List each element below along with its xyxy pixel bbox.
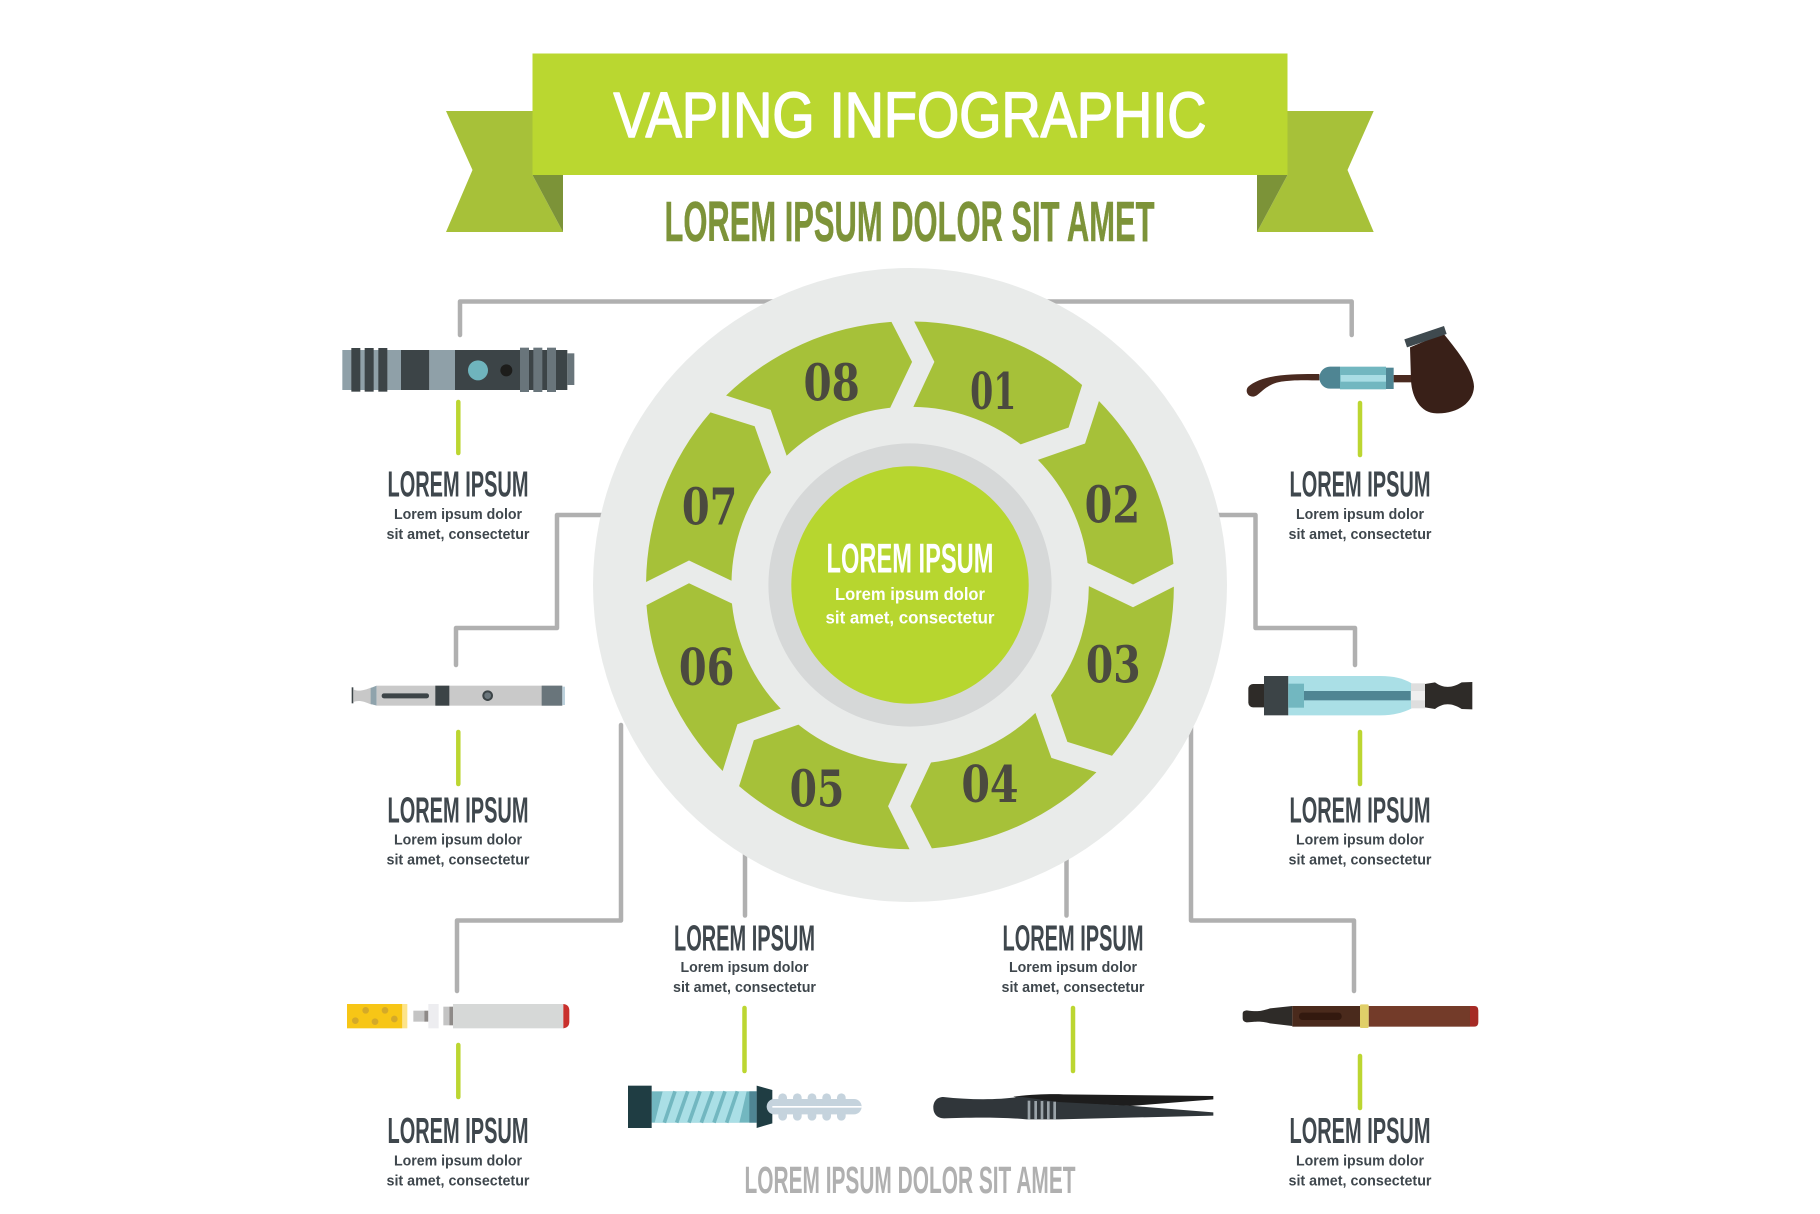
banner ribbon [446, 54, 1374, 232]
label: middle left: sit amet, consectetur [386, 852, 530, 868]
segment 01: 01 [970, 362, 1016, 421]
label: lower centre right: Lorem ipsum dolor [1009, 959, 1137, 976]
label: middle right: sit amet, consectetur [1288, 852, 1432, 868]
label: bottom left: Lorem ipsum dolor [394, 1152, 522, 1170]
connector lines [456, 302, 1355, 991]
label: bottom right: LOREM IPSUM [1290, 1110, 1430, 1151]
subtitle: LOREM IPSUM DOLOR SIT AMET [664, 191, 1155, 254]
label: bottom right [1288, 1110, 1432, 1190]
inner hub [768, 443, 1052, 727]
label: top right: Lorem ipsum dolor [1296, 506, 1424, 523]
segment 01 [913, 321, 1082, 444]
icon: coil [628, 1086, 862, 1128]
label: bottom right: Lorem ipsum dolor [1296, 1152, 1424, 1170]
footer text: LOREM IPSUM DOLOR SIT AMET [744, 1160, 1076, 1202]
label: top left: sit amet, consectetur [386, 526, 530, 543]
label: lower centre left: Lorem ipsum dolor [680, 959, 809, 976]
hub text [826, 584, 995, 628]
segment 07 [646, 412, 771, 582]
label: bottom left: sit amet, consectetur [386, 1172, 530, 1190]
segment 06 [646, 583, 781, 771]
icon: clearomizer tank [1248, 676, 1472, 715]
icon: vape pipe [1247, 326, 1474, 413]
central circular diagram [593, 268, 1227, 902]
outer disc [593, 268, 1227, 902]
label: top left [386, 464, 530, 543]
label: top right: sit amet, consectetur [1288, 526, 1432, 543]
segment 08 [726, 322, 912, 456]
label: lower centre left [673, 918, 816, 996]
label: lower centre left: sit amet, consectetur [673, 979, 816, 996]
segment 05 [739, 725, 910, 849]
icon: tweezers [933, 1094, 1213, 1120]
segment 03: 03 [1086, 636, 1141, 695]
segment 03 [1051, 586, 1174, 756]
segment 05: 05 [790, 759, 844, 818]
segment 04: 04 [961, 755, 1019, 814]
icon: box mod vape [342, 348, 574, 392]
segment 06: 06 [679, 638, 734, 697]
arrow segments with numbers [646, 321, 1174, 849]
title: VAPING INFOGRAPHIC [614, 79, 1206, 151]
icon: pen vape [352, 686, 565, 706]
label: middle left [386, 790, 530, 868]
label: middle right: LOREM IPSUM [1290, 790, 1430, 831]
accent lines [458, 402, 1360, 1108]
label: top left: LOREM IPSUM [388, 464, 528, 505]
hub text: Lorem ipsum dolor [835, 584, 985, 604]
segment 04 [910, 713, 1096, 848]
label: top right [1288, 464, 1432, 543]
label: lower centre right: LOREM IPSUM [1002, 918, 1144, 958]
label: middle right: Lorem ipsum dolor [1296, 832, 1424, 848]
label: lower centre right: sit amet, consectetur [1002, 979, 1145, 996]
label: lower centre left: LOREM IPSUM [674, 918, 815, 958]
label: middle left: Lorem ipsum dolor [394, 832, 522, 848]
label: bottom left: LOREM IPSUM [388, 1110, 528, 1151]
icon: brown e-cigar [1243, 1004, 1478, 1028]
icon: e-cigarette disassembled [347, 1004, 569, 1028]
label: bottom right: sit amet, consectetur [1288, 1172, 1432, 1190]
label: middle left: LOREM IPSUM [388, 790, 528, 831]
hub heading: LOREM IPSUM [826, 535, 994, 582]
hub text: sit amet, consectetur [826, 608, 995, 628]
label: top right: LOREM IPSUM [1290, 464, 1430, 505]
label: middle right [1288, 790, 1432, 868]
segment 02 [1038, 401, 1173, 584]
segment 08: 08 [803, 354, 860, 413]
label: bottom left [386, 1110, 530, 1190]
label: lower centre right [1002, 918, 1145, 996]
segment 07: 07 [682, 477, 737, 536]
segment 02: 02 [1085, 476, 1140, 535]
label: top left: Lorem ipsum dolor [394, 506, 522, 523]
